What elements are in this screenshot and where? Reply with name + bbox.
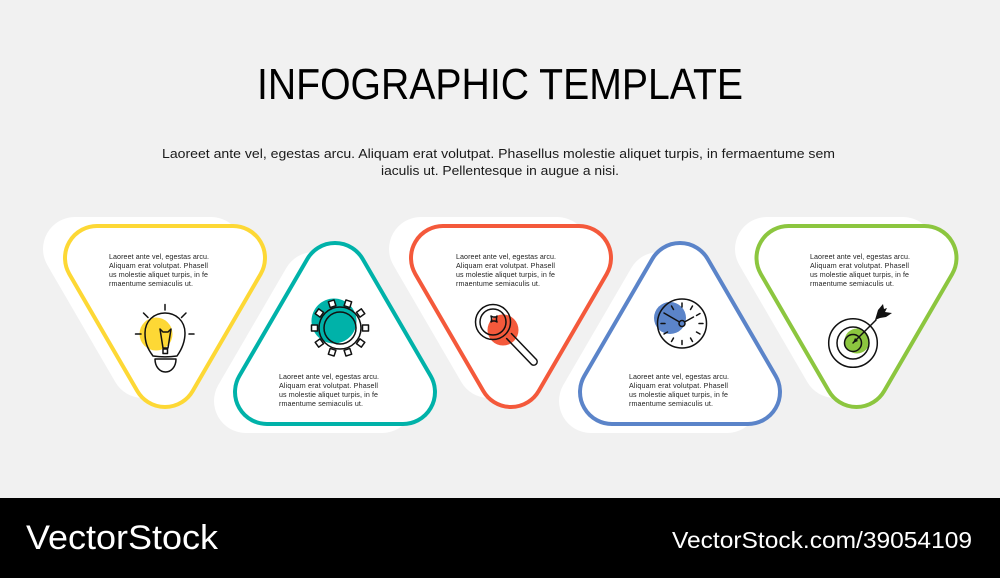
text block: time: rmaentume semiaculis ut. <box>629 400 713 408</box>
text block: settings: Aliquam erat volutpat. Phasell <box>279 382 378 390</box>
text block: settings: Laoreet ante vel, egestas arcu. <box>279 373 379 381</box>
text block: target: rmaentume semiaculis ut. <box>810 280 894 288</box>
intro text: Laoreet ante vel, egestas arcu. Aliquam erat volutpat. Phasellus molestie aliquet turpis, in fermaentume sem <box>162 146 835 161</box>
text block: time: us molestie aliquet turpis, in fe <box>629 391 728 399</box>
text block: target: Laoreet ante vel, egestas arcu. <box>810 253 910 261</box>
text block: target: Aliquam erat volutpat. Phasell <box>810 262 909 270</box>
white backing shapes <box>43 217 956 433</box>
text block: settings: us molestie aliquet turpis, in fe <box>279 391 378 399</box>
footer logo: VectorStock <box>26 519 219 557</box>
text block: idea: rmaentume semiaculis ut. <box>109 280 193 288</box>
text block: search: Aliquam erat volutpat. Phasell <box>456 262 555 270</box>
footer url: VectorStock.com/39054109 <box>672 527 972 553</box>
title: INFOGRAPHIC TEMPLATE <box>257 61 743 109</box>
panel: blue time <box>580 243 780 424</box>
icon: light bulb <box>136 304 194 372</box>
text block: target: us molestie aliquet turpis, in fe <box>810 271 909 279</box>
intro text <box>162 146 835 178</box>
text block: search: rmaentume semiaculis ut. <box>456 280 540 288</box>
footer bar <box>0 498 1000 578</box>
text block: search <box>456 253 556 288</box>
text block: idea: Aliquam erat volutpat. Phasell <box>109 262 208 270</box>
text block: settings <box>279 373 379 408</box>
text block: settings: rmaentume semiaculis ut. <box>279 400 363 408</box>
panel: green target <box>0 226 1000 578</box>
intro text: iaculis ut. Pellentesque in augue a nisi. <box>381 163 619 178</box>
text block: idea <box>109 253 209 288</box>
panel: teal settings <box>235 243 435 424</box>
text block: idea: Laoreet ante vel, egestas arcu. <box>109 253 209 261</box>
panel: red search <box>411 226 611 407</box>
icon: clock <box>654 299 706 348</box>
icon: gear <box>312 298 368 356</box>
icon: magnifier <box>476 304 537 365</box>
text block: search: us molestie aliquet turpis, in fe <box>456 271 555 279</box>
text block: time: Laoreet ante vel, egestas arcu. <box>629 373 729 381</box>
text block: target <box>810 253 910 288</box>
text block: time <box>629 373 729 408</box>
panel: yellow idea <box>65 226 265 407</box>
text block: search: Laoreet ante vel, egestas arcu. <box>456 253 556 261</box>
text block: time: Aliquam erat volutpat. Phasell <box>629 382 728 390</box>
text block: idea: us molestie aliquet turpis, in fe <box>109 271 208 279</box>
icon: target <box>829 304 892 367</box>
